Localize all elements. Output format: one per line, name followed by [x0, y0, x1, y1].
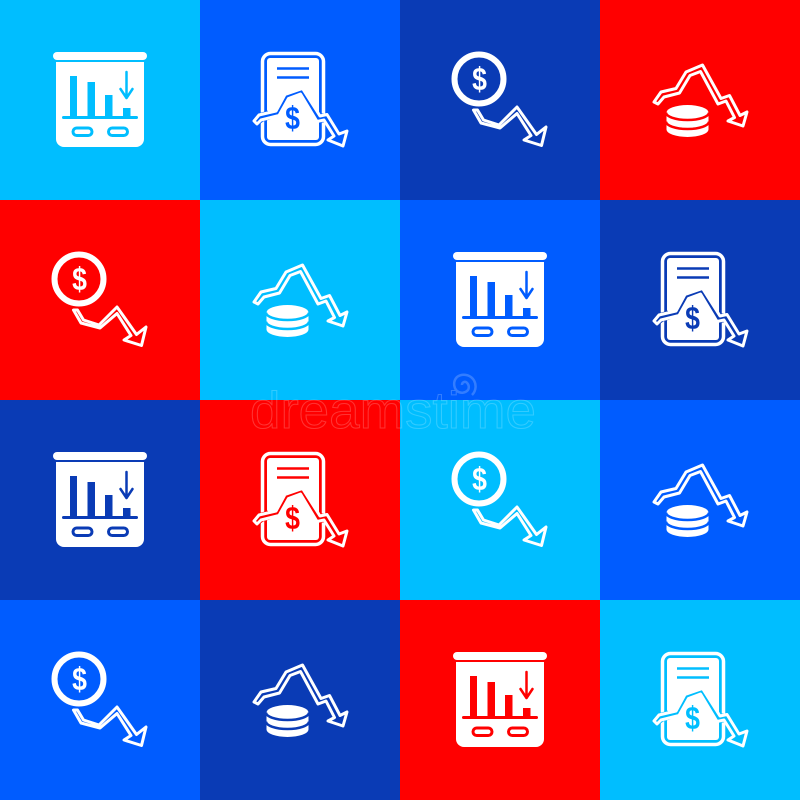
panel: row 4 column 4, house document	[600, 600, 800, 800]
icon: board with falling bar chart	[453, 652, 547, 747]
icon: dollar coin with falling arrow	[54, 654, 146, 746]
icon: dollar coin with falling arrow: $	[472, 462, 487, 498]
icon: board with falling bar chart	[53, 52, 147, 147]
panel: row 3 column 3, dollar coin	[400, 400, 600, 600]
icon: board with falling bar chart	[53, 452, 147, 547]
panel: row 2 column 3, presentation board	[400, 200, 600, 400]
panel: row 4 column 3, presentation board	[400, 600, 600, 800]
panel: row 4 column 1, dollar coin	[0, 600, 200, 800]
panel: row 1 column 1, presentation board	[0, 0, 200, 200]
watermark: spiral logo and wordmark: dreamstime	[250, 382, 536, 440]
icon: document with dollar and falling arrow	[252, 54, 347, 146]
icon: coin stack with falling arrow	[254, 665, 347, 737]
panel: row 2 column 4, house document	[600, 200, 800, 400]
icon: dollar coin with falling arrow	[454, 54, 546, 146]
panel: row 1 column 3, dollar coin	[400, 0, 600, 200]
icon: dollar coin with falling arrow: $	[472, 62, 487, 98]
icon: coin stack with falling arrow	[254, 265, 347, 337]
panel: row 2 column 2, coin stack	[200, 200, 400, 400]
panel: row 1 column 2, house document	[200, 0, 400, 200]
icon: dollar coin with falling arrow: $	[72, 662, 87, 698]
icon: coin stack with falling arrow	[654, 465, 747, 537]
panel: row 3 column 2, house document	[200, 400, 400, 600]
icon: coin stack with falling arrow	[654, 65, 747, 137]
icon: document with dollar and falling arrow: $	[685, 301, 700, 337]
icon: document with dollar and falling arrow	[652, 254, 747, 346]
icon: document with dollar and falling arrow: $	[685, 701, 700, 737]
panel: row 3 column 1, presentation board	[0, 400, 200, 600]
panel: row 1 column 4, coin stack	[600, 0, 800, 200]
icon: dollar coin with falling arrow	[454, 454, 546, 546]
panel: row 2 column 1, dollar coin	[0, 200, 200, 400]
icon: document with dollar and falling arrow: $	[285, 101, 300, 137]
icon: document with dollar and falling arrow: $	[285, 501, 300, 537]
icon: document with dollar and falling arrow	[652, 654, 747, 746]
icon: document with dollar and falling arrow	[252, 454, 347, 546]
panel: row 3 column 4, coin stack	[600, 400, 800, 600]
icon: dollar coin with falling arrow	[54, 254, 146, 346]
icon: board with falling bar chart	[453, 252, 547, 347]
panel: row 4 column 2, coin stack	[200, 600, 400, 800]
icon: dollar coin with falling arrow: $	[72, 262, 87, 298]
